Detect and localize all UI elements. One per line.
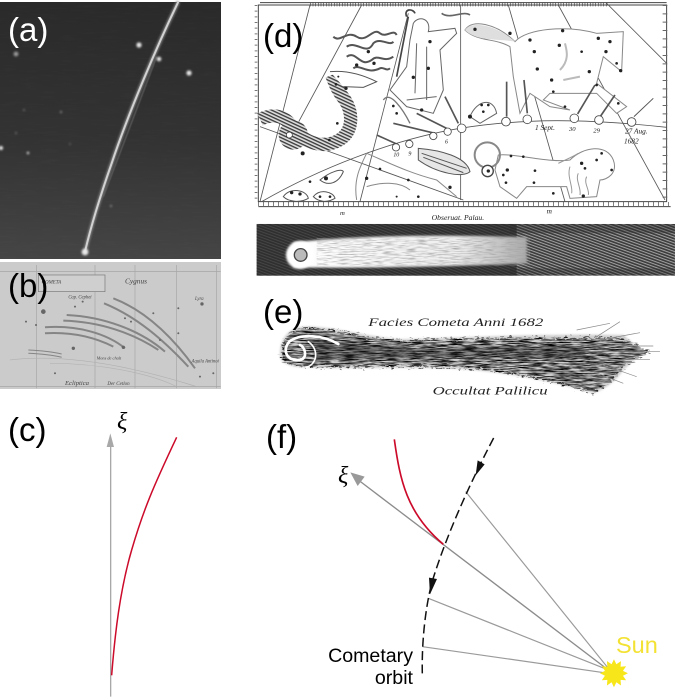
comet tail streaks on chart — [28, 298, 195, 368]
panel d: comet engraving band — [257, 224, 675, 276]
chart annotations: 1 Sept. — [535, 123, 555, 132]
chart annotations: 1682 — [624, 136, 639, 145]
comet positions along ecliptic — [392, 114, 636, 151]
dashed cometary orbit — [422, 438, 494, 674]
comet tail in band — [293, 236, 530, 268]
radial lines from the sun — [423, 492, 608, 673]
chart annotations: 30 — [568, 126, 576, 133]
handwritten captions — [367, 315, 548, 398]
chart labels — [42, 276, 220, 387]
comet head in band — [286, 241, 314, 269]
chart annotations: Obseruat. Palau. — [432, 213, 484, 222]
comet tail hatch — [280, 322, 660, 393]
snake figure — [260, 75, 351, 144]
panel a: photograph of comet tail on dark sky — [0, 2, 221, 259]
sun icon — [600, 659, 628, 687]
panel b: engraved star chart with tail streaks — [0, 262, 221, 389]
spiral comet head — [286, 336, 338, 367]
chart labels: Aquila Antinoi — [191, 360, 220, 365]
panel e: engraving of comet with spiral head — [280, 307, 660, 398]
chart grid lines — [0, 265, 221, 388]
label (f): (f) — [266, 418, 297, 455]
comet tail streak — [85, 2, 178, 252]
panel c: tail coordinate axis and red curve — [107, 433, 177, 697]
red tail curve — [394, 439, 443, 544]
panel d: star chart of comet path — [256, 3, 671, 222]
label (b): (b) — [8, 267, 48, 304]
label (d): (d) — [263, 17, 303, 54]
chart annotations: 27 Aug. — [625, 126, 648, 135]
panel f: orbit geometry diagram — [350, 438, 628, 687]
label (e): (e) — [263, 293, 303, 330]
chart annotations: m — [340, 210, 345, 217]
comet tails on chart — [377, 80, 653, 144]
perseus figure — [390, 19, 457, 113]
chart labels: Ecliptica — [64, 380, 90, 387]
chart annotations: 6 — [445, 139, 448, 145]
faded bleed-through text — [357, 299, 613, 315]
stars in sky — [0, 42, 192, 255]
label (a): (a) — [8, 11, 48, 48]
sun label: Sun — [616, 632, 658, 658]
handwritten captions: Occultat Palilicu — [433, 384, 548, 398]
constellation figures — [260, 10, 627, 201]
xi axis arrow — [350, 472, 608, 670]
meridian lines — [260, 3, 667, 202]
xi symbol of panel c: ξ — [117, 409, 128, 435]
chart labels: Cygnus — [125, 276, 147, 285]
xi symbol of panel f: ξ — [338, 463, 349, 489]
chart labels: COMETA — [42, 280, 62, 285]
chart labels: Mons de chalt — [96, 355, 122, 360]
chart labels: Lyra — [194, 297, 204, 302]
cometary orbit label: orbit — [375, 667, 414, 689]
feathered comet at centre — [418, 148, 470, 175]
chart annotations: m — [547, 206, 552, 215]
medusa head — [333, 32, 397, 70]
chart labels: Cap. Cephei — [68, 295, 92, 300]
bear figure — [465, 24, 627, 113]
cometary orbit label: Cometary — [328, 645, 413, 667]
chart annotations — [340, 123, 648, 222]
chart annotations: 29 — [593, 127, 601, 134]
chart annotations: 9 — [408, 152, 411, 158]
fishes figures — [283, 170, 343, 201]
lion figure — [495, 149, 615, 198]
label (c): (c) — [8, 411, 46, 448]
handwritten captions: Facies Cometa Anni 1682 — [367, 315, 543, 329]
chart labels: Der Cetlon — [106, 382, 130, 387]
chart frame and scales — [256, 3, 671, 207]
chart annotations: 10 — [393, 153, 399, 159]
red tail curve — [112, 437, 177, 675]
axis arrow xi — [107, 433, 114, 697]
stars on chart — [290, 28, 622, 198]
